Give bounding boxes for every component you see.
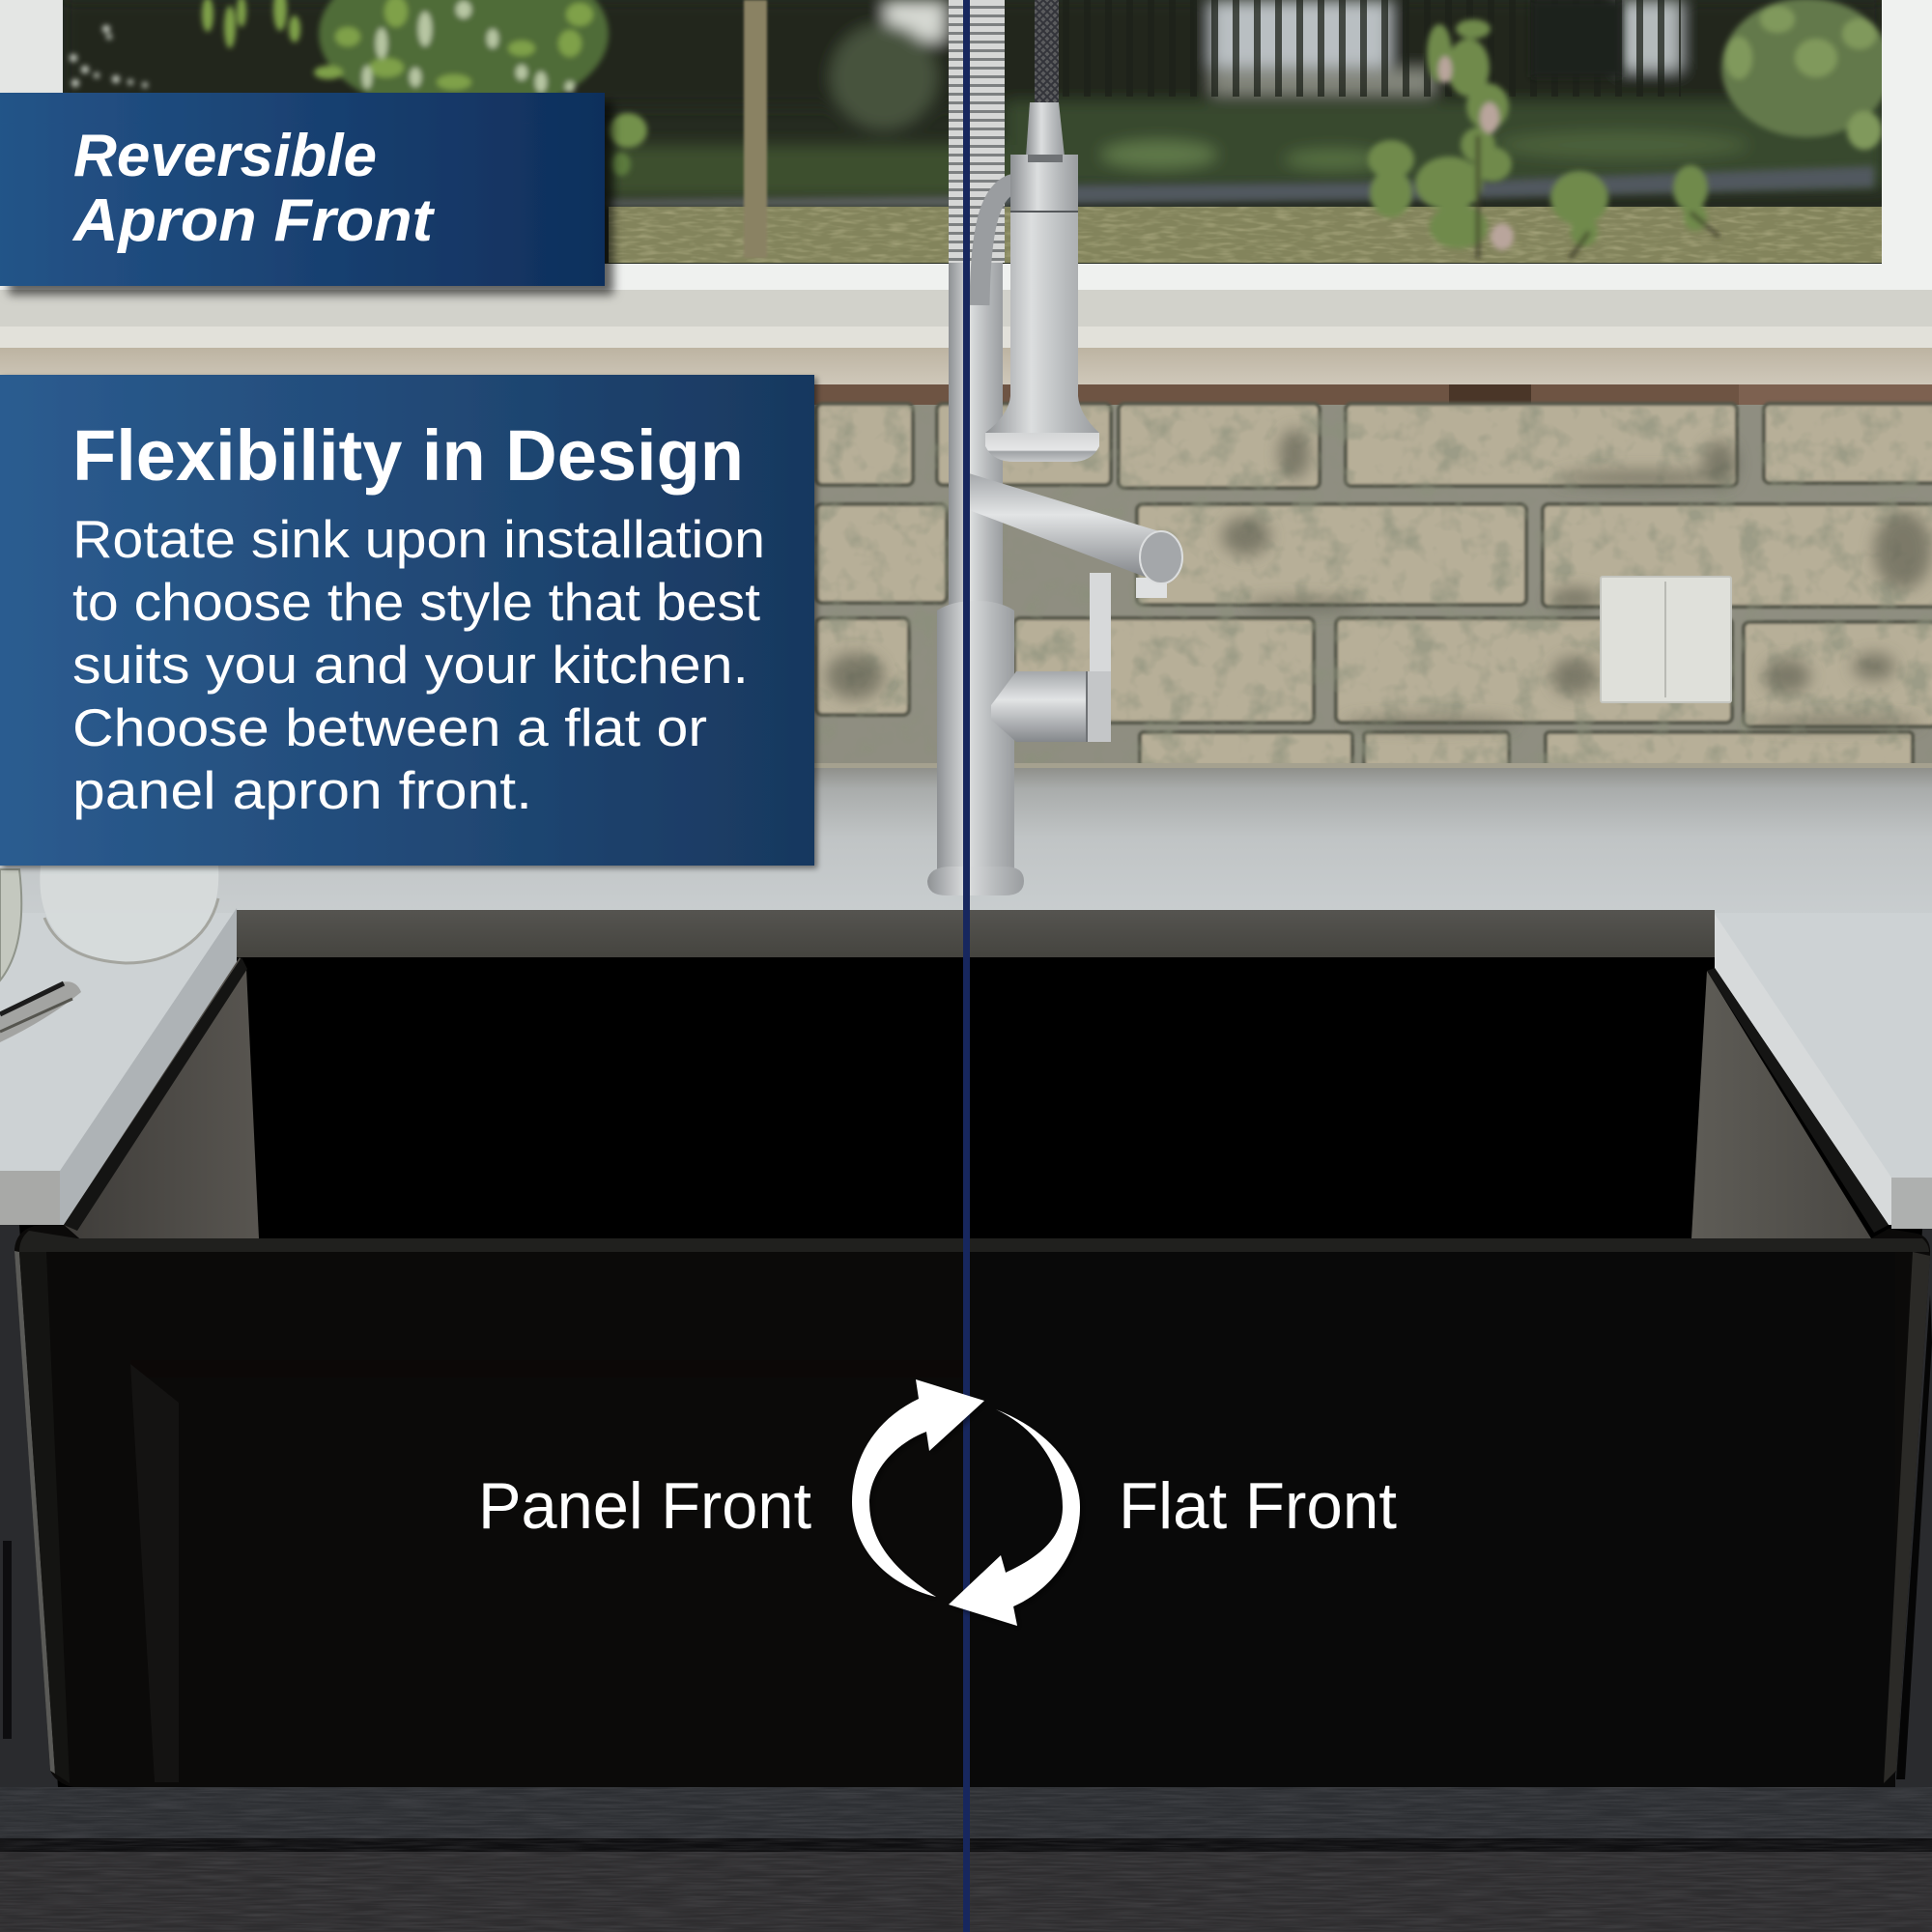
panel heading: Flexibility in Design [72, 415, 744, 496]
label: Flat Front: Flat Front [1119, 1469, 1397, 1543]
brick backsplash [811, 404, 1932, 769]
apron front of the sink [14, 1225, 1932, 1788]
center divider line [963, 0, 970, 1932]
label: Panel Front: Panel Front [478, 1469, 811, 1543]
panel body text: suits you and your kitchen. [72, 635, 749, 695]
foliage: saplings and right tree [1368, 0, 1891, 259]
wall switch [1601, 577, 1731, 702]
panel body text: panel apron front. [72, 760, 532, 820]
panel: Flexibility in Design [0, 375, 814, 866]
banner title: Reversible [73, 123, 377, 189]
panel body text: to choose the style that best [72, 572, 760, 632]
banner title: Apron Front [71, 187, 435, 254]
sink basin interior [64, 910, 1889, 1246]
glass and towel on counter [0, 866, 218, 1042]
panel body text: Choose between a flat or [72, 697, 707, 757]
foliage: upper left tree [70, 0, 647, 176]
banner title [71, 123, 435, 254]
heading banner: Reversible Apron Front [0, 93, 605, 286]
wooden window sill [0, 348, 1932, 405]
lower cabinet sides [0, 1225, 1932, 1787]
panel body text: Rotate sink upon installation [72, 509, 765, 569]
faucet [927, 0, 1182, 895]
icon: rotation arrows [852, 1379, 1080, 1626]
countertop [0, 768, 1932, 1229]
panel body text [72, 509, 765, 820]
lower cabinet and floor [0, 1787, 1932, 1932]
window frame [0, 0, 1932, 350]
window view: garden outside [0, 0, 1932, 270]
